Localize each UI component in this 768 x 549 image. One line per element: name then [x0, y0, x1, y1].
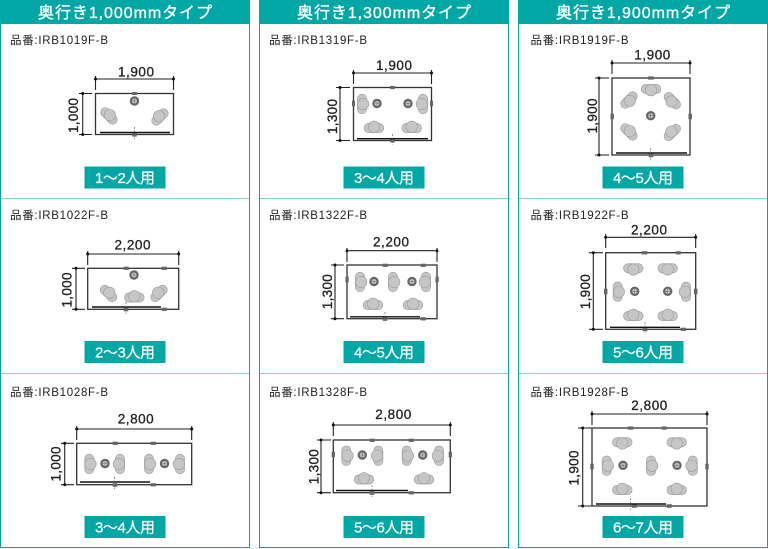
- model code: IRB1328F-B: 品番:IRB1328F-B: [269, 386, 367, 399]
- floor plan: IRB1319F-B: 1,900: [376, 58, 412, 73]
- model code: IRB1319F-B: 品番:IRB1319F-B: [269, 34, 367, 47]
- capacity badge: 4-5 people: 4〜5人用: [613, 170, 673, 187]
- panel: depth 1,900mm column: [518, 0, 768, 548]
- floor plan: IRB1922F-B: 2,200: [631, 222, 667, 238]
- floor plan: IRB1028F-B: 1,000: [48, 446, 64, 482]
- floor plan: IRB1019F-B: 1,900: [118, 64, 154, 80]
- floor plan: IRB1928F-B: [566, 398, 708, 510]
- model code: IRB1928F-B: 品番:IRB1928F-B: [530, 386, 629, 399]
- capacity badge: 1-2 people: [84, 166, 166, 188]
- model code: IRB1322F-B: 品番:IRB1322F-B: [269, 209, 367, 222]
- floor plan: IRB1022F-B: 2,200: [114, 238, 150, 252]
- heading: depth 1,300mm: 奥行き1,300mmタイプ: [297, 4, 471, 22]
- floor plan: IRB1028F-B: [48, 412, 192, 489]
- capacity badge: 5-6 people: [602, 341, 684, 363]
- floor plan: IRB1922F-B: 1,900: [578, 274, 593, 309]
- capacity badge: 3-4 people: 3〜4人用: [95, 520, 155, 536]
- floor plan: IRB1019F-B: [66, 64, 174, 139]
- floor plan: IRB1319F-B: 1,300: [325, 99, 340, 134]
- capacity badge: 3-4 people: [344, 166, 424, 188]
- model code: IRB1022F-B: 品番:IRB1022F-B: [10, 209, 108, 222]
- floor plan: IRB1922F-B: [578, 222, 697, 333]
- capacity badge: 2-3 people: 2〜3人用: [95, 344, 155, 362]
- capacity badge: 3-4 people: [84, 516, 166, 538]
- heading: depth 1,000mm: [0, 0, 250, 24]
- heading: depth 1,000mm: 奥行き1,000mmタイプ: [38, 4, 212, 22]
- floor plan: IRB1919F-B: 1,900: [634, 48, 670, 62]
- floor plan: IRB1022F-B: 1,000: [60, 272, 75, 308]
- model code: IRB1922F-B: 品番:IRB1922F-B: [530, 209, 629, 222]
- capacity badge: 3-4 people: 3〜4人用: [354, 170, 414, 187]
- floor plan: IRB1919F-B: [585, 48, 692, 160]
- capacity badge: 6-7 people: 6〜7人用: [613, 520, 673, 536]
- model code: IRB1028F-B: 品番:IRB1028F-B: [10, 386, 108, 399]
- heading: depth 1,900mm: 奥行き1,900mmタイプ: [556, 4, 730, 22]
- floor plan: IRB1928F-B: 2,800: [631, 398, 667, 413]
- floor plan: IRB1328F-B: 2,800: [375, 407, 411, 422]
- floor plan: IRB1328F-B: [306, 407, 452, 497]
- floor plan: IRB1322F-B: 2,200: [373, 234, 409, 250]
- capacity badge: 5-6 people: 5〜6人用: [354, 520, 414, 536]
- floor plan: IRB1919F-B: 1,900: [585, 98, 600, 134]
- model code: IRB1019F-B: 品番:IRB1019F-B: [10, 34, 108, 47]
- capacity badge: 4-5 people: 4〜5人用: [354, 344, 414, 362]
- floor plan: IRB1028F-B: 2,800: [118, 412, 154, 426]
- model code: IRB1919F-B: 品番:IRB1919F-B: [530, 34, 629, 47]
- heading: depth 1,300mm: [259, 0, 509, 24]
- capacity badge: 4-5 people: [602, 166, 684, 188]
- floor plan: IRB1322F-B: [320, 234, 438, 323]
- floor plan: IRB1022F-B: [60, 238, 179, 314]
- capacity badge: 1-2 people: 1〜2人用: [95, 170, 155, 187]
- panel: depth 1,000mm column: [0, 0, 250, 548]
- heading: depth 1,900mm: [518, 0, 768, 24]
- floor plan: IRB1928F-B: 1,900: [566, 450, 581, 486]
- floor plan: IRB1322F-B: 1,300: [320, 274, 335, 309]
- capacity badge: 4-5 people: [344, 341, 424, 363]
- capacity badge: 5-6 people: [344, 516, 424, 538]
- capacity badge: 2-3 people: [84, 341, 166, 363]
- panel: depth 1,300mm column: [259, 0, 509, 548]
- capacity badge: 5-6 people: 5〜6人用: [613, 344, 673, 362]
- floor plan: IRB1019F-B: 1,000: [66, 98, 81, 133]
- floor plan: IRB1328F-B: 1,300: [306, 449, 322, 484]
- capacity badge: 6-7 people: [602, 516, 684, 538]
- floor plan: IRB1319F-B: [325, 58, 433, 145]
